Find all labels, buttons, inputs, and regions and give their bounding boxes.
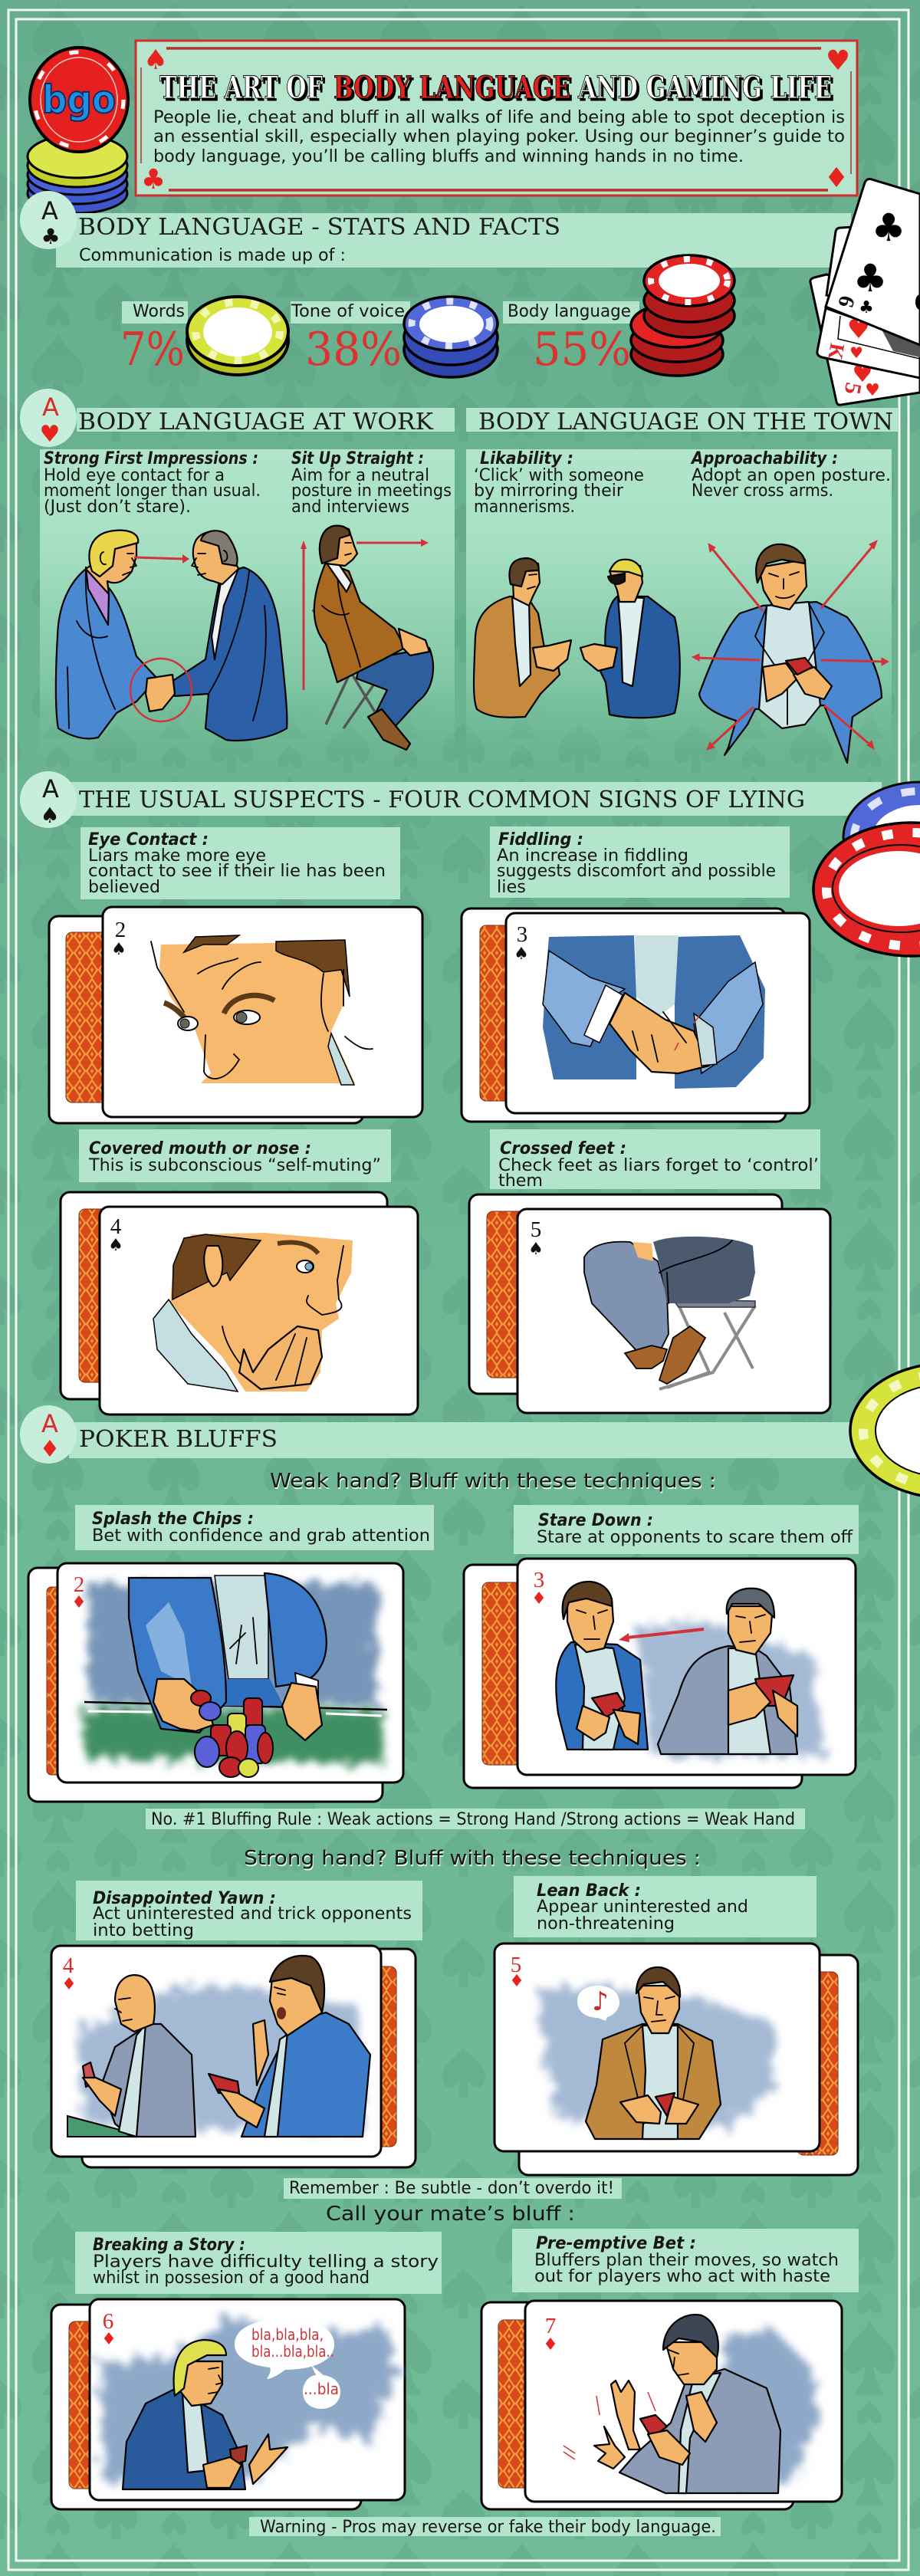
rank — [528, 1217, 544, 1259]
tip: breaking a story: Players have difficulty telling a story — [93, 2252, 439, 2272]
tip: strong first impressions: moment longer than usual. — [44, 481, 261, 501]
card: five of diamonds, lean back — [495, 1944, 858, 2175]
sub heading: Communication is made up of : — [79, 246, 346, 265]
card: two of spades, eye contact — [49, 907, 422, 1123]
blue wash — [88, 1583, 380, 1706]
tip: approachability: Approachability : — [690, 449, 838, 468]
tip: likability: mannerisms. — [474, 498, 575, 517]
warning callout: Warning - Pros may reverse or fake their body language. — [260, 2518, 716, 2537]
stat: body language 55% — [503, 255, 734, 376]
tip: covered mouth: Covered mouth or nose : — [89, 1139, 311, 1158]
subheading: call your mate's bluff: Call your mate’s bluff : — [326, 2203, 575, 2226]
section heading: poker bluffs: POKER BLUFFS — [79, 1426, 278, 1453]
rank — [101, 2309, 117, 2349]
left man — [56, 531, 157, 739]
section heading: usual suspects — [20, 771, 882, 828]
blue wash — [636, 1622, 824, 1756]
tip: approachability: Never cross arms. — [692, 481, 833, 501]
green table — [84, 1708, 383, 1763]
tip: pre-emptive bet: Bluffers plan their moves, so watch — [534, 2251, 839, 2270]
card: five of hearts: ♥ — [853, 361, 872, 388]
tip: covered mouth: This is subconscious “self-muting” — [88, 1156, 381, 1175]
title heading: THE ART OF — [162, 72, 325, 108]
corner suit: heart: ♥ — [826, 45, 850, 77]
man in blue jacket with sunglasses — [580, 560, 680, 718]
tip: crossed feet: them — [498, 1171, 543, 1191]
tip: sit up straight: posture in meetings — [291, 481, 452, 501]
green table corner — [67, 2116, 146, 2137]
rank: ♦ — [71, 1593, 87, 1612]
icon: clasped hands — [146, 675, 175, 711]
tip: likability — [474, 449, 644, 517]
icon: yellow chip — [187, 297, 288, 375]
tip: sit up straight: Aim for a neutral — [291, 466, 429, 485]
arrow: stare — [619, 1629, 704, 1642]
stat: tone of voice 38%: 38% — [305, 323, 402, 376]
tip: fiddling: suggests discomfort and possible — [497, 862, 776, 881]
tip: crossed feet — [490, 1129, 820, 1191]
logo chip stack — [28, 48, 128, 213]
card: king of hearts: ♥ — [847, 314, 870, 345]
card: six of clubs: 6 — [833, 293, 859, 310]
speech bubble with music note: ♪ — [592, 1986, 609, 2017]
title heading — [159, 70, 834, 108]
stat: body language 55%: 55% — [533, 323, 631, 376]
tip: fiddling: Fiddling : — [498, 830, 583, 849]
stat: words 7%: Words — [133, 302, 185, 321]
speech bubble: bla bla: bla,bla,bla, — [251, 2325, 324, 2344]
card: two of diamonds, splash the chips — [28, 1563, 403, 1802]
tip: approachability — [690, 449, 891, 501]
illustration: face with eyes — [151, 935, 373, 1085]
section heading: body language at work: BODY LANGUAGE AT WORK — [78, 409, 434, 435]
tip: fiddling: lies — [497, 878, 526, 897]
tip: stare down: Stare at opponents to scare them off — [537, 1528, 853, 1547]
corner suit: club: ♣ — [141, 164, 166, 196]
card: hidden back card — [826, 226, 866, 307]
stat: tone of voice 38% — [291, 297, 498, 377]
tip: fiddling — [490, 826, 790, 898]
tip: strong first impressions: Strong First Impressions : — [44, 449, 258, 468]
playing cards fan, top right — [810, 179, 920, 405]
tip: eye contact: contact to see if their lie has been — [88, 862, 386, 881]
section heading: poker bluffs — [20, 1405, 859, 1464]
folding chair — [313, 610, 387, 732]
tip: disappointed yawn: Disappointed Yawn : — [93, 1889, 276, 1908]
tip: likability: Likability : — [480, 449, 573, 468]
ace of spades badge: ♠ — [40, 803, 60, 828]
title heading: AND GAMING LIFE — [580, 72, 834, 108]
tip: splash the chips: Splash the Chips : — [92, 1510, 254, 1529]
tip: sit up straight: Sit Up Straight : — [291, 449, 424, 468]
card: five of hearts: ♥ — [865, 381, 880, 400]
subheading: strong hand: Strong hand? Bluff with these techniques : — [245, 1848, 702, 1871]
card: five of hearts — [810, 274, 920, 405]
ace of clubs badge — [20, 191, 77, 249]
tip: lean back: Appear uninterested and — [537, 1898, 748, 1917]
tip: strong first impressions: Hold eye contact for a — [44, 466, 225, 485]
tip: eye contact: believed — [88, 878, 160, 897]
ace of clubs badge: A — [41, 196, 58, 225]
right man — [165, 531, 287, 741]
tip: splash the chips: Bet with confidence and grab attention — [92, 1526, 430, 1546]
section heading: body language at work — [20, 389, 455, 448]
speech bubble: bla bla — [235, 2319, 334, 2379]
card: four of diamonds, disappointed yawn — [51, 1946, 416, 2167]
rank: 2 — [74, 1572, 84, 1597]
rank — [531, 1568, 547, 1608]
card: six of clubs: ♣ — [859, 298, 874, 317]
card: six of clubs: ♣ — [872, 205, 905, 250]
tip: strong first impressions — [44, 449, 261, 517]
card: king of hearts — [817, 308, 920, 378]
ace of diamonds badge — [20, 1405, 77, 1464]
tip: eye contact: Liars make more eye — [88, 846, 266, 866]
tip: disappointed yawn — [76, 1881, 422, 1940]
stat: body language 55%: Body language — [508, 302, 631, 321]
ace of spades badge: A — [42, 774, 59, 803]
arrows: open posture — [692, 540, 889, 750]
man in grey jacket — [564, 2315, 780, 2493]
card: six of clubs — [826, 179, 920, 345]
left man with cards — [556, 1582, 648, 1750]
rank: 6 — [103, 2309, 113, 2334]
rank: ♦ — [531, 1589, 547, 1608]
card: king of hearts: K — [823, 342, 849, 362]
rank — [543, 2314, 558, 2354]
tip: breaking a story: whilst in possesion of a good hand — [93, 2269, 370, 2288]
speech bubble: bla bla: bla...bla,bla.. — [251, 2342, 334, 2361]
tip: disappointed yawn: into betting — [93, 1921, 194, 1940]
rank — [108, 1214, 123, 1255]
rank: ♦ — [101, 2330, 117, 2349]
title panel — [136, 41, 857, 196]
stat: words 7% — [120, 297, 288, 376]
speech bubble: ...bla — [303, 2365, 340, 2409]
title heading: BODY LANGUAGE — [336, 72, 573, 108]
tip: stare down — [514, 1505, 859, 1554]
tip: sit up straight: and interviews — [291, 498, 409, 517]
remember callout: Remember : Be subtle - don’t overdo it! — [289, 2179, 614, 2198]
illustration: crossed feet on stool — [584, 1237, 755, 1389]
heading text: BODY LANGUAGE - STATS AND FACTS — [78, 214, 560, 241]
tip: approachability: Adopt an open posture. — [692, 466, 891, 485]
section heading: stats and facts — [20, 191, 851, 268]
card: five of spades, crossed feet — [469, 1194, 830, 1413]
title heading: THE ART OF — [159, 70, 323, 106]
tip: sit up straight — [291, 449, 452, 517]
card: six of diamonds, breaking a story — [51, 2299, 405, 2509]
man in tan jacket — [586, 1967, 721, 2139]
rank: 2 — [115, 918, 126, 942]
rule callout: No. #1 Bluffing Rule : Weak actions = Strong Hand /Strong actions = Weak Hand — [151, 1810, 795, 1829]
ace of hearts badge: ♥ — [40, 421, 60, 448]
stat: tone of voice 38%: Tone of voice — [291, 302, 405, 321]
rank: 5 — [531, 1217, 541, 1242]
tip: pre-emptive bet — [512, 2229, 859, 2292]
rank — [71, 1572, 87, 1612]
tip: eye contact — [80, 827, 400, 899]
card: three of spades, fiddling — [462, 909, 810, 1122]
tip: breaking a story: Breaking a Story : — [93, 2236, 245, 2255]
panel: on the town — [466, 449, 892, 765]
intro text — [153, 108, 845, 166]
card: three of diamonds, stare down — [464, 1559, 856, 1788]
rank: 3 — [517, 922, 527, 947]
card: king of hearts: ♥ — [849, 343, 863, 362]
rank: 5 — [511, 1953, 521, 1977]
ace of diamonds badge: ♦ — [40, 1436, 60, 1463]
card: six of clubs: ♣ — [853, 256, 887, 301]
tip: crossed feet: Crossed feet : — [500, 1139, 626, 1158]
ace of diamonds badge: A — [41, 1409, 58, 1438]
rank: 4 — [110, 1214, 122, 1239]
rank — [514, 922, 529, 964]
intro text: an essential skill, especially when playing poker. Using our beginner’s guide to — [153, 127, 845, 146]
tip: lean back — [514, 1876, 816, 1937]
icon: blue chip — [404, 297, 498, 377]
arrow: straight back — [301, 540, 307, 690]
rank — [61, 1953, 77, 1994]
section heading: usual suspects: THE USUAL SUSPECTS - FOUR COMMON SIGNS OF LYING — [79, 787, 805, 813]
tip: strong first impressions: (Just don’t stare). — [44, 498, 191, 517]
tip: pre-emptive bet: out for players who act with haste — [534, 2267, 830, 2286]
rank: 4 — [63, 1953, 74, 1978]
rank — [509, 1953, 524, 1991]
rank: ♦ — [61, 1975, 77, 1994]
illustration: mirroring men — [474, 558, 680, 718]
tip: likability: ‘Click’ with someone — [474, 466, 644, 485]
red circle around handshake — [130, 659, 192, 721]
jacket and legs — [356, 648, 433, 727]
ace of hearts badge — [20, 389, 77, 448]
tip: eye contact: Eye Contact : — [88, 830, 209, 849]
rank: ♦ — [509, 1972, 524, 1991]
rank: ♠ — [111, 940, 127, 959]
illustration: fiddling hands — [543, 935, 765, 1089]
arrow: eye contact — [134, 554, 189, 564]
subheading: weak hand: Weak hand? Bluff with these techniques : — [271, 1471, 717, 1494]
icon: chip pile — [191, 1691, 273, 1777]
card: five of hearts: 5 — [840, 380, 866, 396]
ace of clubs badge: ♣ — [41, 224, 61, 249]
man in grey jacket — [83, 1975, 196, 2137]
right man with cards — [658, 1589, 797, 1754]
rank: ♠ — [108, 1236, 123, 1255]
speech bubble with music note — [577, 1986, 619, 2021]
card: seven of diamonds, pre-emptive bet — [481, 2301, 842, 2509]
tip: splash the chips — [75, 1505, 434, 1550]
blue wash — [724, 2327, 816, 2480]
subheading: weak hand: Weak hand? Bluff with these techniques : — [270, 1470, 716, 1493]
illustration: open posture man — [699, 544, 882, 763]
intro text: body language, you’ll be calling bluffs and winning hands in no time. — [153, 147, 744, 166]
corner suit: spade: ♠ — [143, 44, 168, 76]
tip: pre-emptive bet: Pre-emptive Bet : — [536, 2234, 696, 2253]
blue wash — [100, 2319, 395, 2480]
stat: words 7%: 7% — [120, 323, 185, 376]
arrow: neutral gaze — [356, 539, 429, 547]
illustration: player torso — [129, 1573, 327, 1740]
section heading: body language on the town: BODY LANGUAGE ON THE TOWN — [478, 409, 893, 435]
rank: ♦ — [543, 2335, 558, 2354]
card: four of spades, covered mouth — [61, 1192, 418, 1414]
man in tan jacket — [474, 558, 571, 718]
icon: red chip stacks — [631, 255, 734, 376]
blue wash — [77, 1986, 364, 2131]
blue wash — [537, 1987, 774, 2128]
intro text: People lie, cheat and bluff in all walks of life and being able to spot deception is — [153, 108, 845, 127]
tip: lean back: non-threatening — [537, 1914, 675, 1934]
tip: stare down: Stare Down : — [538, 1511, 653, 1530]
subheading: strong hand: Strong hand? Bluff with these techniques : — [244, 1847, 701, 1870]
tip: fiddling: An increase in fiddling — [497, 846, 688, 866]
rank: ♠ — [514, 945, 529, 964]
tip: breaking a story — [75, 2232, 442, 2294]
tip: covered mouth — [79, 1129, 391, 1182]
illustration: handshake — [56, 531, 287, 741]
decorative chips at right: blue and red — [813, 782, 920, 956]
decorative chip at right: yellow — [850, 1363, 920, 1498]
rank: 7 — [545, 2314, 556, 2338]
rank: 3 — [534, 1568, 544, 1592]
tip: lean back: Lean Back : — [537, 1881, 641, 1901]
illustration: seated man — [313, 526, 433, 750]
panel: at work — [40, 449, 455, 765]
corner suit: diamond: ♦ — [824, 163, 849, 194]
title heading: BODY LANGUAGE — [334, 70, 570, 106]
tip: disappointed yawn: Act uninterested and trick opponents — [93, 1904, 412, 1924]
man in navy jacket — [123, 2340, 288, 2489]
title heading: AND GAMING LIFE — [577, 70, 832, 106]
illustration: hand over mouth — [153, 1233, 353, 1392]
speech bubble: ...bla: ...bla — [304, 2380, 339, 2398]
man in blue jacket yawning — [209, 1956, 370, 2137]
tip: likability: by mirroring their — [474, 481, 624, 501]
logo wordmark: bgo — [42, 77, 116, 122]
rank: ♠ — [528, 1240, 544, 1259]
tip: crossed feet: Check feet as liars forget to ‘control’ — [498, 1156, 819, 1175]
ace of spades badge — [20, 771, 77, 828]
rank — [111, 918, 127, 959]
ace of hearts badge: A — [42, 393, 59, 422]
